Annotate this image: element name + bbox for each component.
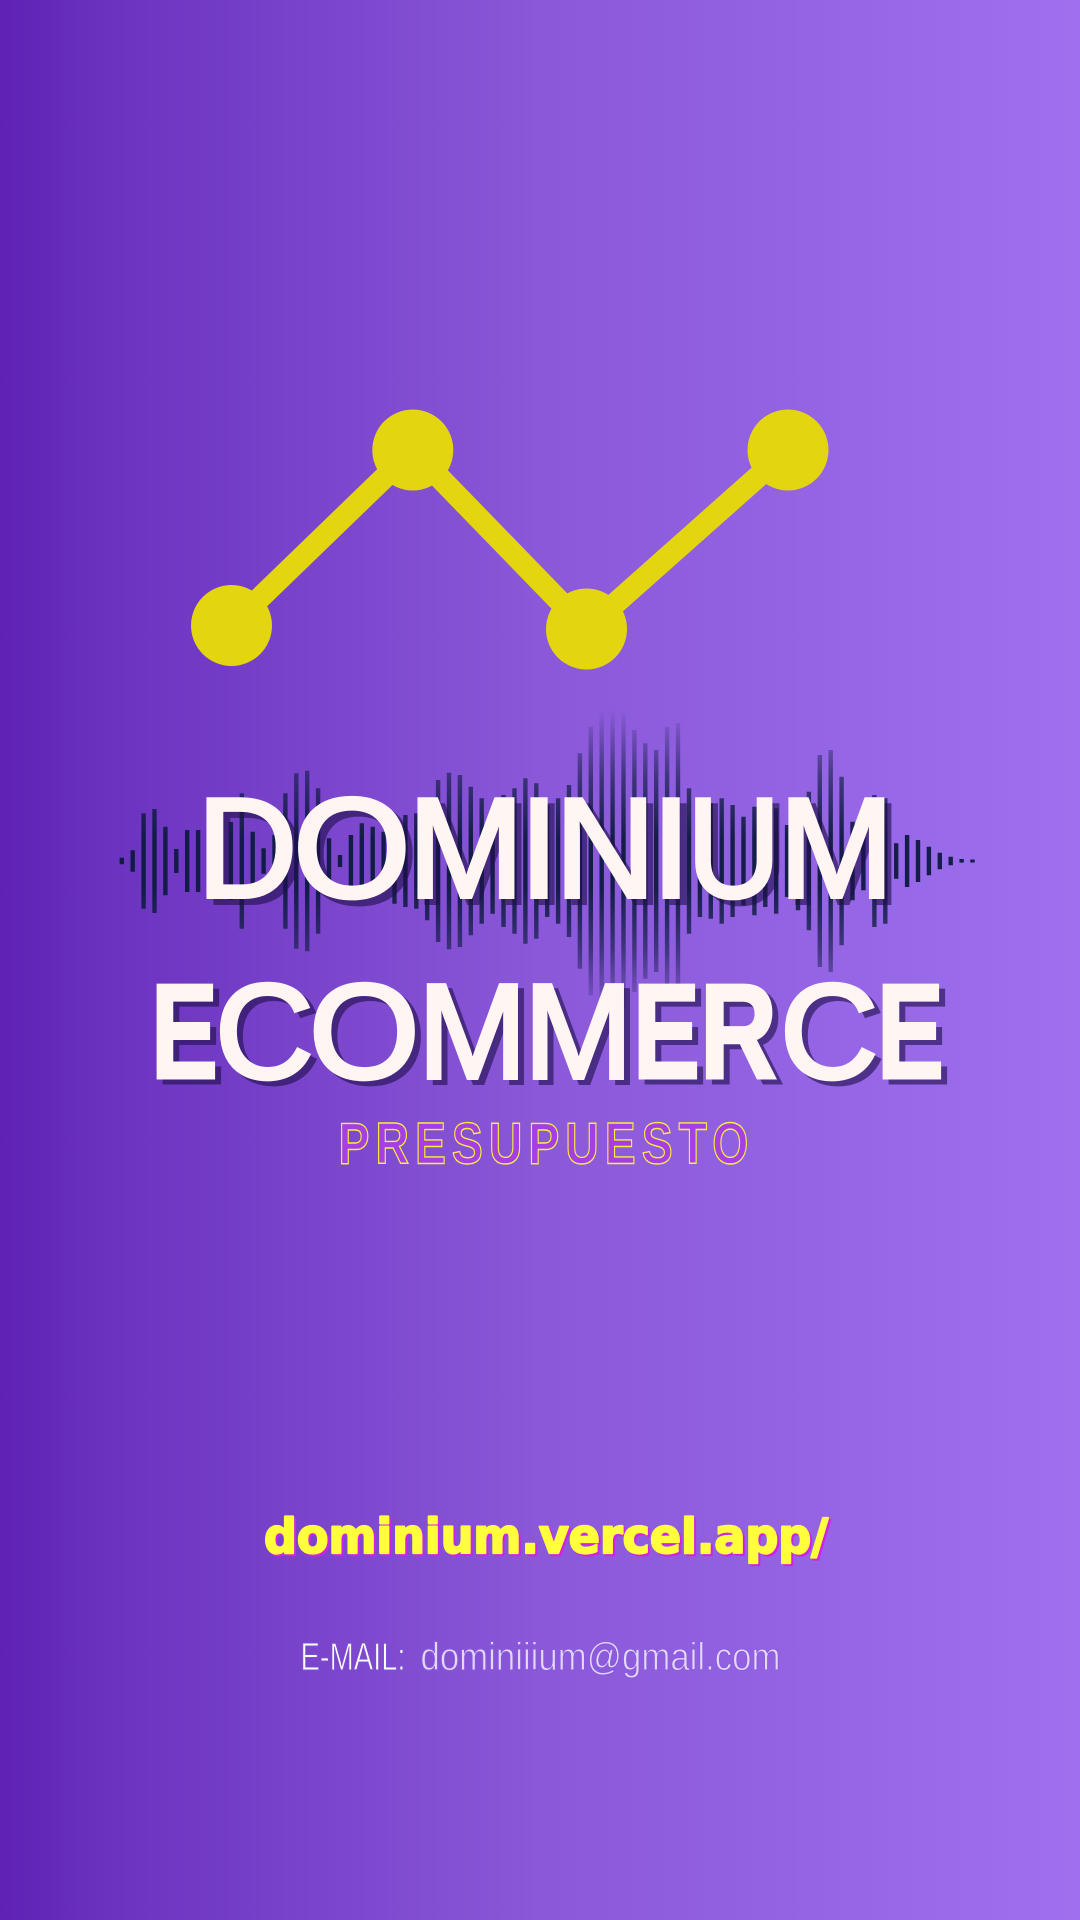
- title: ECOMMERCE: C: [780, 956, 878, 1107]
- contact e-mail: dominiiium@gmail.com: [420, 1636, 780, 1679]
- title: DOMINIUM: I: [519, 769, 559, 928]
- title: DOMINIUM: [197, 769, 894, 928]
- icon: yellow line chart with four nodes: [191, 410, 828, 670]
- website URL: dominium.vercel.app/: [264, 1509, 828, 1565]
- contact e-mail: E-MAIL:: [300, 1636, 406, 1679]
- title: ECOMMERCE: M: [524, 956, 633, 1107]
- title: ECOMMERCE: O: [309, 956, 420, 1107]
- title: ECOMMERCE: R: [700, 956, 777, 1107]
- title: ECOMMERCE: C: [215, 956, 313, 1107]
- title: DOMINIUM: M: [779, 769, 894, 928]
- sound waveform behind the title: [122, 710, 973, 1012]
- title: DOMINIUM: O: [293, 769, 411, 928]
- title: ECOMMERCE: M: [418, 956, 527, 1107]
- title: ECOMMERCE: [150, 956, 948, 1107]
- contact e-mail: [300, 1636, 780, 1679]
- title: ECOMMERCE: E: [876, 956, 943, 1107]
- title: DOMINIUM: M: [408, 769, 524, 928]
- title: DOMINIUM: D: [197, 769, 298, 928]
- title: ECOMMERCE: E: [150, 956, 217, 1107]
- subtitle: PRESUPUESTO: PRESUPUESTO: [338, 1112, 754, 1177]
- title: DOMINIUM: I: [651, 769, 691, 928]
- title: ECOMMERCE: E: [633, 956, 700, 1107]
- title: DOMINIUM: U: [687, 769, 780, 928]
- title: DOMINIUM: N: [555, 769, 656, 928]
